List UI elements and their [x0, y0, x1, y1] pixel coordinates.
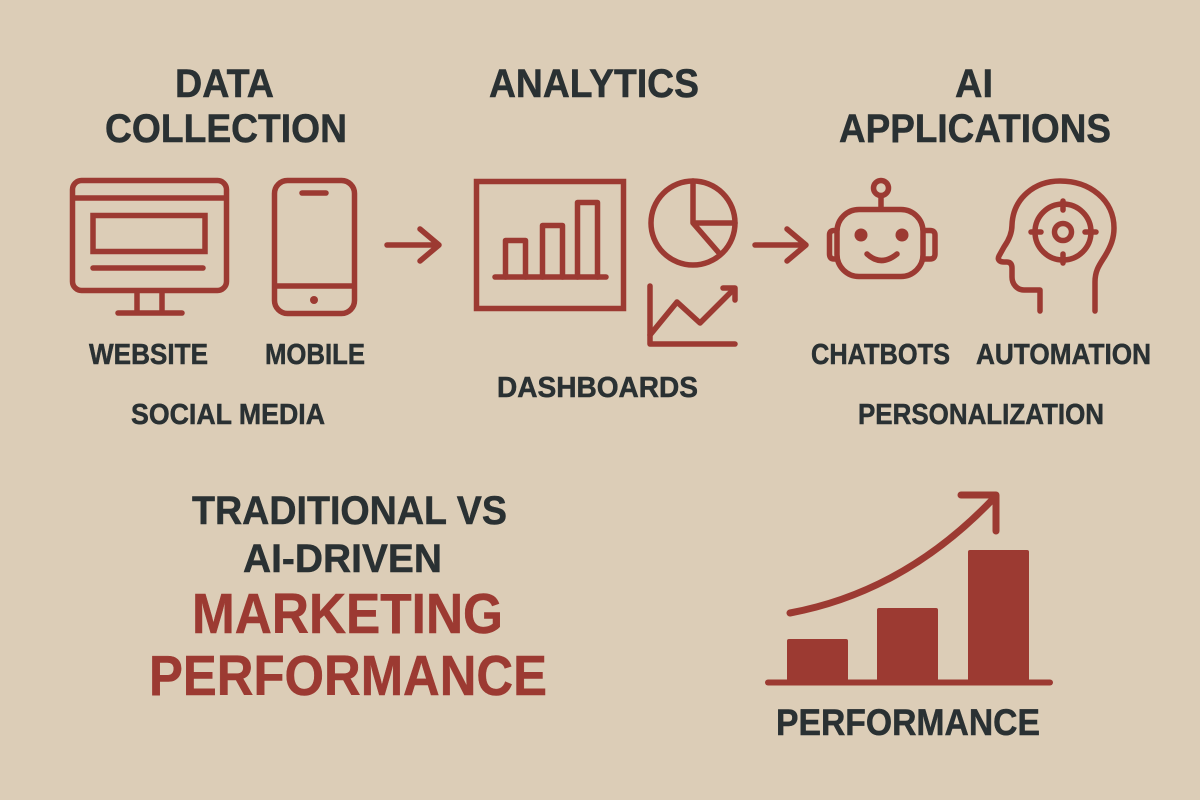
icon: mobile phone: [274, 180, 354, 314]
bar: tall: [968, 550, 1029, 683]
heading: AI applications: AI: [955, 62, 993, 106]
arrow: growth curve: [790, 495, 996, 613]
title: marketing: MARKETING: [192, 582, 503, 646]
icon: pie chart: [651, 181, 735, 265]
panel: performance chart: [768, 495, 1050, 743]
label: personalization: PERSONALIZATION: [858, 399, 1104, 431]
label: chatbots: CHATBOTS: [811, 339, 950, 371]
icon: dashboard bar chart: [476, 182, 624, 308]
heading: AI applications: [839, 62, 1111, 151]
label: social media: SOCIAL MEDIA: [131, 399, 325, 431]
label: performance: PERFORMANCE: [776, 702, 1040, 743]
bar: small: [787, 639, 848, 683]
panel: analytics: [476, 62, 735, 404]
chart baseline: [768, 680, 1050, 686]
bar: medium: [877, 608, 938, 683]
arrow: data collection to analytics: [387, 229, 439, 261]
icon: head with target: [998, 181, 1114, 311]
label: website: WEBSITE: [89, 339, 208, 371]
panel: data collection: [72, 62, 365, 431]
label: automation: AUTOMATION: [976, 339, 1151, 371]
title: AI-driven: AI-DRIVEN: [243, 537, 442, 581]
icon: line chart: [650, 286, 735, 344]
heading: data collection: COLLECTION: [105, 107, 347, 151]
heading: data collection: DATA: [175, 62, 274, 106]
heading: analytics: ANALYTICS: [489, 62, 699, 106]
panel: AI applications: [811, 62, 1151, 431]
icon: website monitor: [72, 180, 226, 313]
title: traditional vs: TRADITIONAL VS: [192, 489, 507, 533]
heading: AI applications: APPLICATIONS: [839, 107, 1111, 151]
icon: chatbot: [830, 180, 935, 276]
label: dashboards: DASHBOARDS: [497, 372, 698, 404]
title: performance: PERFORMANCE: [149, 644, 547, 708]
arrow: analytics to AI applications: [755, 229, 806, 261]
title block: [149, 489, 547, 708]
label: mobile: MOBILE: [265, 339, 365, 371]
heading: data collection: [105, 62, 347, 151]
